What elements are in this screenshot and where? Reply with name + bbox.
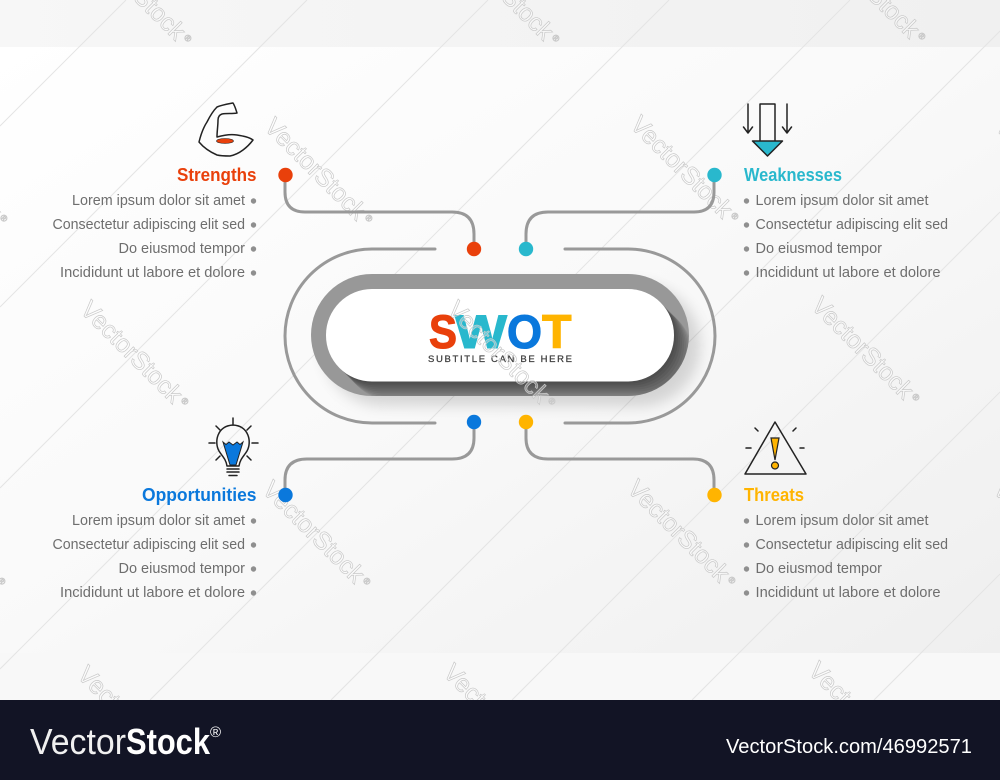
text list: Do eiusmod tempor	[756, 240, 882, 257]
connector: opportunities	[278, 415, 481, 502]
watermarks: VectorStock	[257, 476, 369, 589]
text list: Incididunt ut labore et dolore	[60, 584, 245, 601]
heading: Weaknesses	[744, 165, 842, 185]
subtitle: SUBTITLE CAN BE HERE	[428, 354, 572, 365]
text list	[52, 512, 256, 601]
heading: Threats	[744, 485, 804, 505]
connector: threats	[519, 415, 722, 502]
watermarks: ®	[182, 32, 194, 44]
title: SWOT: S	[429, 305, 457, 358]
connector: weaknesses	[519, 168, 722, 256]
title: SWOT	[429, 305, 572, 358]
text list: Consectetur adipiscing elit sed	[756, 536, 948, 553]
title: SWOT: T	[542, 305, 572, 358]
icon: flexed arm	[199, 103, 253, 156]
title: SWOT: O	[507, 305, 542, 358]
panel: opportunities	[52, 418, 258, 601]
panel: strengths	[52, 103, 256, 281]
watermarks: ®	[363, 212, 375, 224]
watermarks: ®	[361, 575, 373, 587]
panel: threats	[744, 422, 948, 601]
footer url: VectorStock.com/46992571	[726, 736, 972, 758]
left track	[285, 249, 435, 423]
pill inner shadow	[343, 306, 689, 396]
watermarks: ®	[726, 574, 738, 586]
watermarks: VectorStock	[806, 292, 918, 405]
footer logo: Vector	[30, 721, 126, 762]
title: SWOT: W	[455, 305, 508, 358]
text list: Lorem ipsum dolor sit amet	[756, 192, 929, 209]
watermarks: ®	[179, 395, 191, 407]
panel: central pill	[311, 274, 692, 400]
text list: Incididunt ut labore et dolore	[756, 584, 940, 601]
watermarks: ®	[550, 32, 562, 44]
heading: Opportunities	[142, 485, 256, 505]
centre watermark: ®	[546, 395, 558, 407]
watermarks: Vect	[72, 661, 125, 714]
text list: Consectetur adipiscing elit sed	[756, 216, 948, 233]
connector: strengths	[278, 168, 481, 256]
pill outer ring	[311, 274, 689, 396]
footer logo: ®	[210, 724, 221, 741]
right track	[565, 249, 715, 423]
text list	[744, 192, 948, 281]
text list: Lorem ipsum dolor sit amet	[72, 192, 246, 209]
watermarks: VectorStock	[622, 475, 734, 588]
watermarks: VectorStock	[75, 296, 187, 409]
panel: weaknesses	[744, 104, 948, 281]
pill face	[326, 289, 674, 382]
watermarks: Vect	[438, 659, 491, 712]
text list: Consectetur adipiscing elit sed	[52, 216, 245, 233]
footer logo: Stock	[126, 721, 211, 762]
footer logo	[30, 721, 221, 762]
watermarks: ®	[729, 210, 741, 222]
watermarks: VectorStock	[625, 111, 737, 224]
footer bar	[0, 700, 1000, 780]
text list: Incididunt ut labore et dolore	[756, 264, 940, 281]
soft outer shadow	[322, 284, 700, 406]
text list	[744, 512, 948, 601]
watermarks: ®	[910, 391, 922, 403]
heading: Strengths	[177, 165, 256, 185]
text list: Consectetur adipiscing elit sed	[52, 536, 245, 553]
centre watermark: VectorStock	[442, 296, 554, 409]
text list: Do eiusmod tempor	[118, 240, 245, 257]
text list	[52, 192, 256, 281]
text list: Do eiusmod tempor	[118, 560, 245, 577]
text list: Lorem ipsum dolor sit amet	[72, 512, 246, 529]
text list: Lorem ipsum dolor sit amet	[756, 512, 929, 529]
watermarks: Vect	[803, 657, 856, 710]
text list: Do eiusmod tempor	[756, 560, 882, 577]
icon: warning triangle	[745, 422, 806, 474]
text list: Incididunt ut labore et dolore	[60, 264, 245, 281]
icon: light bulb	[209, 418, 258, 476]
icon: down arrows	[744, 104, 792, 156]
watermarks: ®	[916, 30, 928, 42]
watermarks: VectorStock	[259, 113, 371, 226]
